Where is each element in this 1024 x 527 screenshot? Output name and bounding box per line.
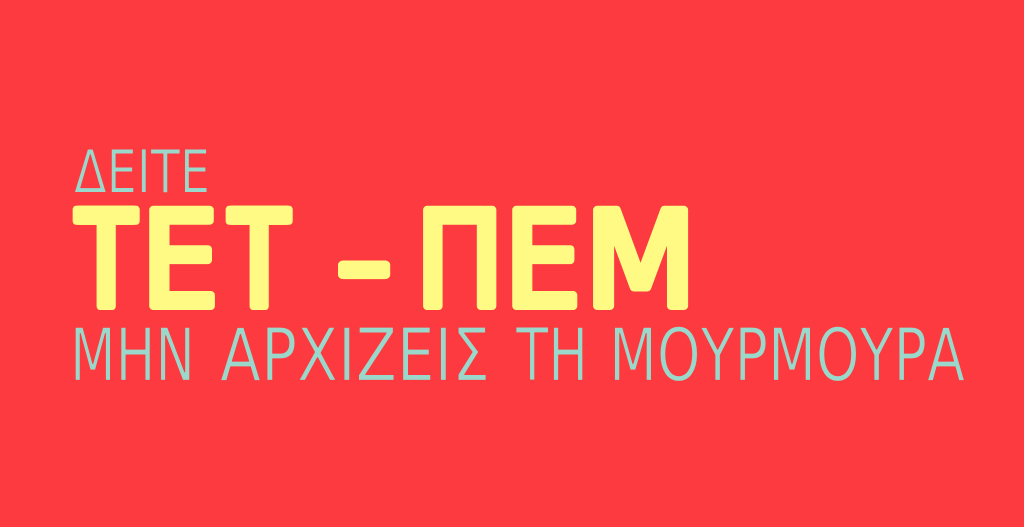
main title: ΤΕΤ - ΠΕΜ: Ε (141, 184, 219, 338)
main title: ΤΕΤ - ΠΕΜ: Τ (230, 183, 289, 337)
main title: ΤΕΤ - ΠΕΜ: Μ (585, 184, 696, 338)
small heading: ΔΕΙΤΕ: ΔΕΙΤΕ (74, 138, 210, 208)
main title: ΤΕΤ - ΠΕΜ: - (336, 184, 393, 337)
main title: ΤΕΤ - ΠΕΜ: Ε (504, 184, 581, 338)
subtitle: ΜΗΝ ΑΡΧΙΖΕΙΣ ΤΗ ΜΟΥΡΜΟΥΡΑ: ΜΟΥΡΜΟΥΡΑ (609, 314, 965, 398)
main title: ΤΕΤ - ΠΕΜ (77, 183, 696, 338)
subtitle: ΜΗΝ ΑΡΧΙΖΕΙΣ ΤΗ ΜΟΥΡΜΟΥΡΑ (70, 314, 965, 398)
subtitle: ΜΗΝ ΑΡΧΙΖΕΙΣ ΤΗ ΜΟΥΡΜΟΥΡΑ: ΜΗΝ (70, 314, 195, 398)
main title: ΤΕΤ - ΠΕΜ: Π (416, 183, 504, 337)
main title: ΤΕΤ - ΠΕΜ: Τ (77, 183, 136, 337)
subtitle: ΜΗΝ ΑΡΧΙΖΕΙΣ ΤΗ ΜΟΥΡΜΟΥΡΑ: ΤΗ (515, 314, 588, 398)
subtitle: ΜΗΝ ΑΡΧΙΖΕΙΣ ΤΗ ΜΟΥΡΜΟΥΡΑ: ΑΡΧΙΖΕΙΣ (220, 314, 490, 398)
